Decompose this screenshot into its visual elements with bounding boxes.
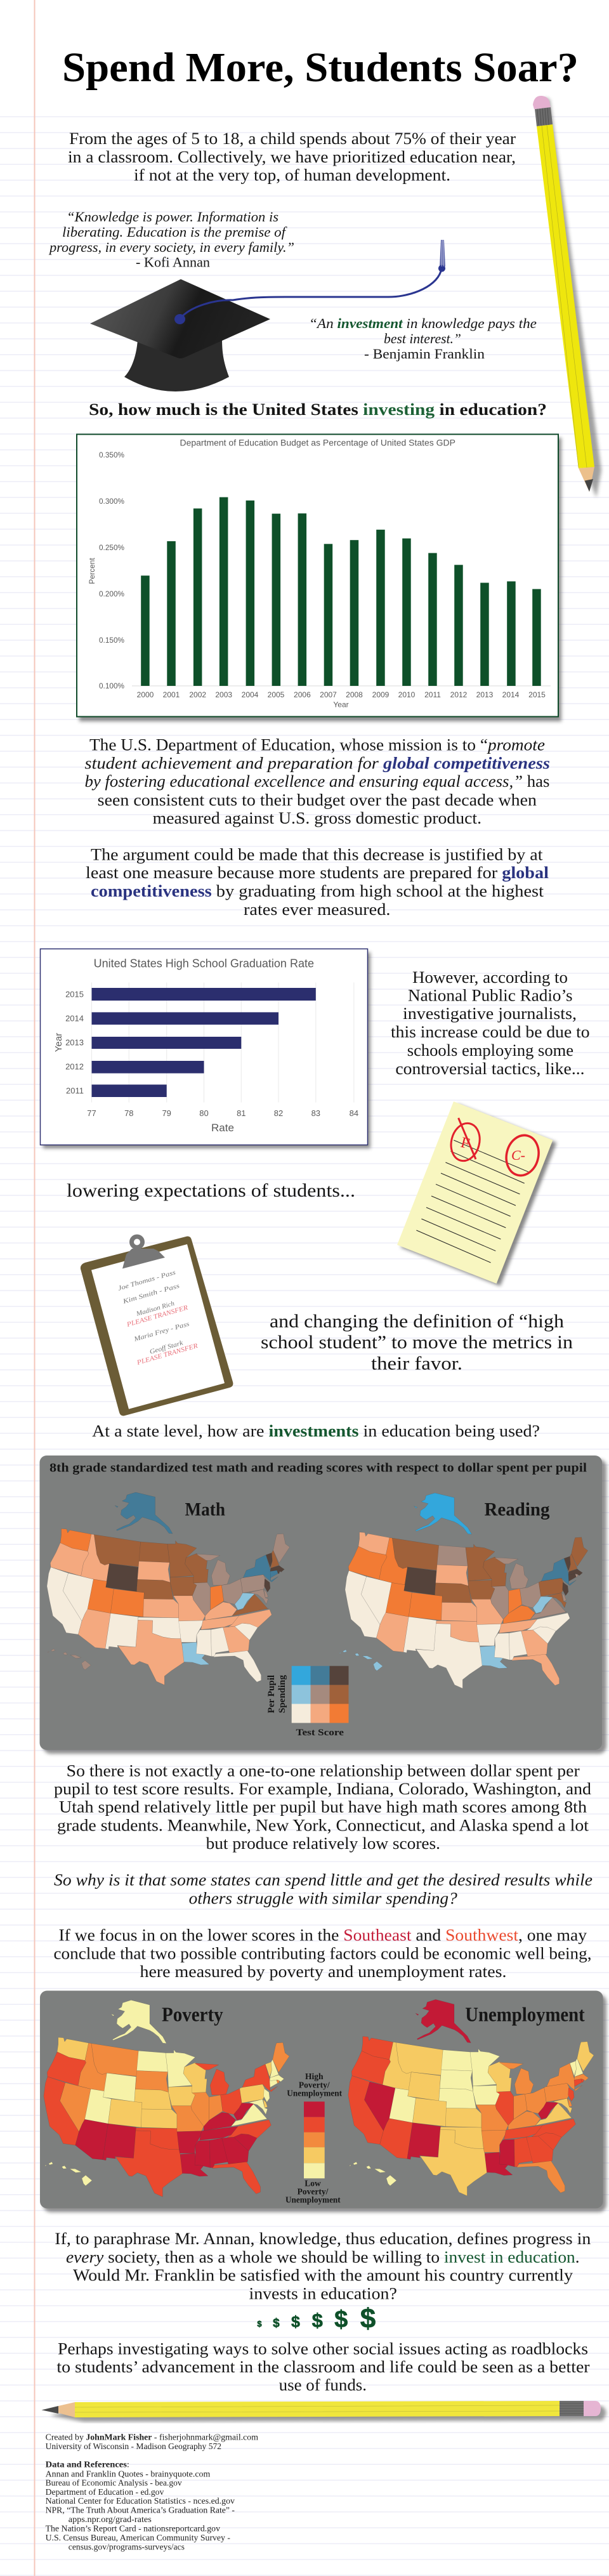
credits and references: census.gov/programs-surveys/acs [69, 2542, 185, 2552]
legend: poverty and unemployment scale: Low [304, 2179, 321, 2188]
text: lowering expectations: lowering expectations of students... [67, 1180, 355, 1201]
bar chart: education budget as percent of GDP [77, 434, 561, 721]
bar chart: education budget as percent of GDP: Year [333, 700, 349, 709]
bar chart: education budget as percent of GDP: 2013 [476, 690, 494, 699]
intro paragraph: From the ages of 5 to 18, a child spends about 75% of their year [69, 129, 516, 148]
bar chart: high school graduation rate: 83 [311, 1108, 320, 1118]
icon: graded paper [397, 1101, 556, 1286]
bar chart: high school graduation rate: 78 [124, 1108, 134, 1118]
legend: poverty and unemployment scale: Unemployment [285, 2195, 341, 2205]
icon: clipboard with roster: Madison Rich [135, 1300, 175, 1318]
label: Unemployment: Unemployment [465, 2003, 585, 2026]
paragraph: Annan and Franklin conclusion: every society, then as a whole we should be willing to invest in education . [66, 2248, 580, 2266]
text: changing the definition: their favor. [371, 1353, 462, 1374]
paragraph: italic question: others struggle with similar spending? [189, 1889, 457, 1907]
label: Reading: Reading [485, 1499, 549, 1520]
bar chart: education budget as percent of GDP: 2010 [398, 690, 416, 699]
bar chart: high school graduation rate: 77 [87, 1108, 96, 1118]
paragraph: graduation argument: The argument could be made that this decrease is justified by at [91, 845, 543, 864]
paragraph: Annan and Franklin conclusion: If, to paraphrase Mr. Annan, knowledge, thus education, defines progress in [55, 2230, 591, 2248]
text: changing the definition: and changing the definition of “high [270, 1311, 564, 1332]
bar chart: education budget as percent of GDP: 2002 [189, 690, 206, 699]
icon: growing dollar signs: $ [334, 2306, 348, 2333]
bar chart: education budget as percent of GDP: 2009 [372, 690, 390, 699]
map: unemployment [348, 1999, 594, 2196]
bar chart: high school graduation rate [41, 949, 370, 1148]
bar chart: high school graduation rate: Rate [211, 1122, 234, 1134]
paragraph: italic question: So why is it that some states can spend little and get the desired results while [54, 1871, 593, 1889]
bar chart: high school graduation rate: 2013 [65, 1037, 84, 1047]
paragraph: Annan and Franklin conclusion: Would Mr. Franklin be satisfied with the amount his country currently [73, 2266, 573, 2284]
bar chart: high school graduation rate: 2015 [65, 990, 84, 999]
legend: poverty and unemployment scale: High [305, 2072, 324, 2081]
bar chart: education budget as percent of GDP: 2015 [528, 690, 546, 699]
text: NPR controversial tactics: However, according to [412, 968, 568, 987]
icon: graded paper: F [459, 1134, 471, 1152]
text: changing the definition: school student” to move the metrics in [261, 1332, 573, 1353]
bar chart: education budget as percent of GDP: 0.100% [99, 681, 124, 690]
text: NPR controversial tactics: this increase could be due to [391, 1023, 590, 1041]
map: math scores [47, 1492, 290, 1685]
bar chart: education budget as percent of GDP: 0.350% [99, 450, 124, 459]
bar chart: education budget as percent of GDP: 2014 [502, 690, 520, 699]
bar chart: education budget as percent of GDP: 2011 [424, 690, 441, 699]
icon: vertical pencil [533, 96, 601, 497]
intro paragraph: in a classroom. Collectively, we have prioritized education near, [68, 148, 516, 166]
quote: Kofi Annan: liberating. Education is the premise of [62, 224, 287, 240]
quote: Benjamin Franklin: best interest.” [384, 331, 461, 346]
icon: graduation cap [90, 240, 445, 391]
credits and references: Data and References : [46, 2460, 129, 2469]
quote: Benjamin Franklin [309, 315, 537, 362]
paragraph: closing thought: Perhaps investigating ways to solve other social issues acting as roadblocks [58, 2339, 588, 2358]
bar chart: high school graduation rate: 82 [274, 1108, 283, 1118]
paragraph: graduation argument: rates ever measured. [244, 900, 390, 919]
bar chart: education budget as percent of GDP: Percent [88, 558, 96, 584]
icon: clipboard with roster: PLEASE TRANSFER [136, 1343, 199, 1367]
icon: horizontal pencil [42, 2401, 606, 2422]
bar chart: education budget as percent of GDP: 2005 [268, 690, 285, 699]
icon: growing dollar signs [257, 2303, 376, 2334]
legend: poverty and unemployment scale: Poverty/ [298, 2187, 329, 2197]
paragraph: no one-to-one relationship: Utah spend relatively little per pupil but have high math scores among 8th [59, 1798, 587, 1816]
icon: growing dollar signs: $ [291, 2313, 300, 2331]
credits and references: University of Wisconsin - Madison Geography 572 [46, 2441, 221, 2451]
map: poverty [44, 2000, 289, 2197]
paragraph: economic well being: conclude that two possible contributing factors could be economic well being, [53, 1944, 591, 1962]
legend: poverty and unemployment scale [285, 2072, 342, 2205]
paragraph: Department of Education mission: measured against U.S. gross domestic product. [153, 809, 481, 827]
legend: poverty and unemployment scale: Unemployment [287, 2088, 342, 2098]
heading: state level investments: At a state level, how are investments in education being used? [92, 1422, 540, 1440]
bar chart: education budget as percent of GDP: 2012 [450, 690, 468, 699]
bar chart: education budget as percent of GDP: 2001 [163, 690, 180, 699]
text: NPR controversial tactics: National Public Radio’s [408, 986, 573, 1005]
bar chart: high school graduation rate: 2011 [66, 1086, 84, 1095]
legend: bivariate spending and score: Test Score [296, 1728, 344, 1738]
bar chart: high school graduation rate: 81 [237, 1108, 246, 1118]
paragraph: Department of Education mission: The U.S. Department of Education, whose mission is to “ promote [89, 736, 545, 754]
credits and references: The Nation’s Report Card - nationsreportcard.gov [46, 2524, 220, 2533]
credits and references: National Center for Education Statistics - nces.ed.gov [46, 2496, 235, 2506]
icon: graded paper: C- [511, 1147, 525, 1163]
legend: bivariate spending and score: Per Pupil [266, 1675, 277, 1713]
icon: clipboard with roster: PLEASE TRANSFER [126, 1304, 189, 1329]
title: Spend More, Students Soar? [62, 44, 579, 91]
bar chart: education budget as percent of GDP: 0.150% [99, 636, 124, 645]
bar chart: high school graduation rate: 84 [350, 1108, 358, 1118]
text: NPR controversial tactics: investigative journalists, [403, 1004, 577, 1023]
credits and references: Annan and Franklin Quotes - brainyquote.com [46, 2469, 211, 2478]
bar chart: high school graduation rate: 2014 [65, 1013, 84, 1023]
credits and references [46, 2433, 258, 2552]
heading: how much investing: So, how much is the United States investing in education? [89, 400, 547, 419]
paragraph: Department of Education mission: student achievement and preparation for global competitiveness [85, 754, 550, 773]
credits and references: Created by JohnMark Fisher - fisherjohnmark@gmail.com [46, 2433, 258, 2442]
text: NPR controversial tactics: controversial tactics, like... [395, 1060, 585, 1078]
bar chart: high school graduation rate: 2012 [65, 1062, 84, 1072]
text: NPR controversial tactics [391, 968, 590, 1078]
label: Math: Math [185, 1499, 225, 1520]
bar chart: education budget as percent of GDP: 0.300% [99, 497, 124, 506]
paragraph: no one-to-one relationship: grade students. Meanwhile, New York, Connecticut, and Alaska spend a lot [57, 1816, 589, 1835]
bar chart: education budget as percent of GDP: 2000 [137, 690, 154, 699]
quote: Benjamin Franklin: “An investment in knowledge pays the [309, 315, 537, 331]
icon: growing dollar signs: $ [360, 2303, 376, 2334]
credits and references: apps.npr.org/grad-rates [69, 2514, 152, 2524]
icon: growing dollar signs: $ [257, 2319, 262, 2329]
bar chart: education budget as percent of GDP: 2006 [294, 690, 311, 699]
bar chart: high school graduation rate: 80 [199, 1108, 209, 1118]
quote: Kofi Annan [48, 209, 294, 270]
quote: Benjamin Franklin: - Benjamin Franklin [364, 346, 485, 362]
bar chart: education budget as percent of GDP: 2003 [215, 690, 232, 699]
paragraph: graduation argument: competitiveness by graduating from high school at the highest [91, 882, 544, 900]
paragraph: no one-to-one relationship: but produce relatively low scores. [206, 1834, 440, 1853]
paragraph: no one-to-one relationship [54, 1761, 591, 1853]
credits and references: Bureau of Economic Analysis - bea.gov [46, 2478, 182, 2488]
bar chart: education budget as percent of GDP: Department of Education Budget as Percentage of United States GDP [180, 438, 455, 448]
label: Poverty: Poverty [162, 2003, 223, 2026]
icon: clipboard with roster [81, 1235, 233, 1416]
text: NPR controversial tactics: schools employing some [407, 1041, 573, 1060]
panel: test score maps [39, 1456, 606, 1754]
paragraph: economic well being: If we focus in on the lower scores in the Southeast and Southwest , one may [58, 1926, 587, 1944]
icon: clipboard with roster: Geoff Stark [149, 1339, 184, 1356]
bar chart: high school graduation rate: 79 [162, 1108, 171, 1118]
text: changing the definition [261, 1311, 573, 1374]
bar chart: education budget as percent of GDP: 2007 [320, 690, 337, 699]
paragraph: Department of Education mission: seen consistent cuts to their budget over the past decade when [98, 791, 537, 809]
paragraph: closing thought [56, 2339, 590, 2395]
icon: growing dollar signs: $ [273, 2317, 280, 2330]
bar chart: education budget as percent of GDP: 0.250% [99, 543, 124, 552]
credits and references: Department of Education - ed.gov [46, 2487, 164, 2497]
legend: bivariate spending and score [266, 1666, 349, 1738]
credits and references: NPR, “The Truth About America’s Graduation Rate” - [46, 2505, 235, 2514]
intro paragraph [68, 129, 516, 184]
bar chart: education budget as percent of GDP: 2004 [242, 690, 259, 699]
paragraph: closing thought: use of funds. [279, 2376, 367, 2395]
paragraph: graduation argument [86, 845, 549, 919]
bar chart: high school graduation rate: Year [53, 1033, 64, 1052]
credits and references: U.S. Census Bureau, American Community Survey - [46, 2533, 231, 2542]
paragraph: economic well being [53, 1926, 591, 1981]
paragraph: economic well being: here measured by poverty and unemployment rates. [140, 1962, 506, 1981]
legend: poverty and unemployment scale: Poverty/ [299, 2080, 330, 2090]
legend: bivariate spending and score: Spending [277, 1674, 287, 1713]
paragraph: graduation argument: least one measure because more students are prepared for global [86, 864, 549, 882]
paragraph: italic question [54, 1871, 593, 1907]
paragraph: Annan and Franklin conclusion: invests in education? [249, 2284, 397, 2303]
map: reading scores [339, 1493, 588, 1688]
intro paragraph: if not at the very top, of human development. [134, 166, 450, 184]
icon: clipboard with roster: Maria Frey - Pass [133, 1321, 190, 1343]
icon: clipboard with roster: Kim Smith - Pass [122, 1283, 180, 1306]
panel title: test scores: 8th grade standardized test math and reading scores with respect to dollar spent per pupil [49, 1461, 587, 1475]
quote: Kofi Annan: progress, in every society, in every family.” [48, 239, 294, 255]
panel: poverty and unemployment maps [40, 1991, 606, 2212]
paragraph: Department of Education mission: by fostering educational excellence and ensuring equal access,” has [85, 772, 549, 791]
icon: clipboard with roster: Joe Thomas - Pass [117, 1269, 176, 1292]
quote: Kofi Annan: - Kofi Annan [136, 254, 210, 270]
bar chart: education budget as percent of GDP: 2008 [346, 690, 363, 699]
paragraph: Department of Education mission [85, 736, 550, 827]
bar chart: education budget as percent of GDP: 0.200% [99, 589, 124, 598]
paragraph: closing thought: to students’ advancement in the classroom and life could be seen as a better [56, 2358, 590, 2376]
bar chart: high school graduation rate: United States High School Graduation Rate [94, 957, 314, 970]
paragraph: no one-to-one relationship: So there is not exactly a one-to-one relationship between dollar spent per [67, 1761, 580, 1780]
paragraph: no one-to-one relationship: pupil to test score results. For example, Indiana, Colorado, Washington, and [54, 1780, 591, 1798]
paragraph: Annan and Franklin conclusion [55, 2230, 591, 2303]
quote: Kofi Annan: “Knowledge is power. Information is [67, 209, 278, 225]
icon: growing dollar signs: $ [312, 2310, 323, 2331]
